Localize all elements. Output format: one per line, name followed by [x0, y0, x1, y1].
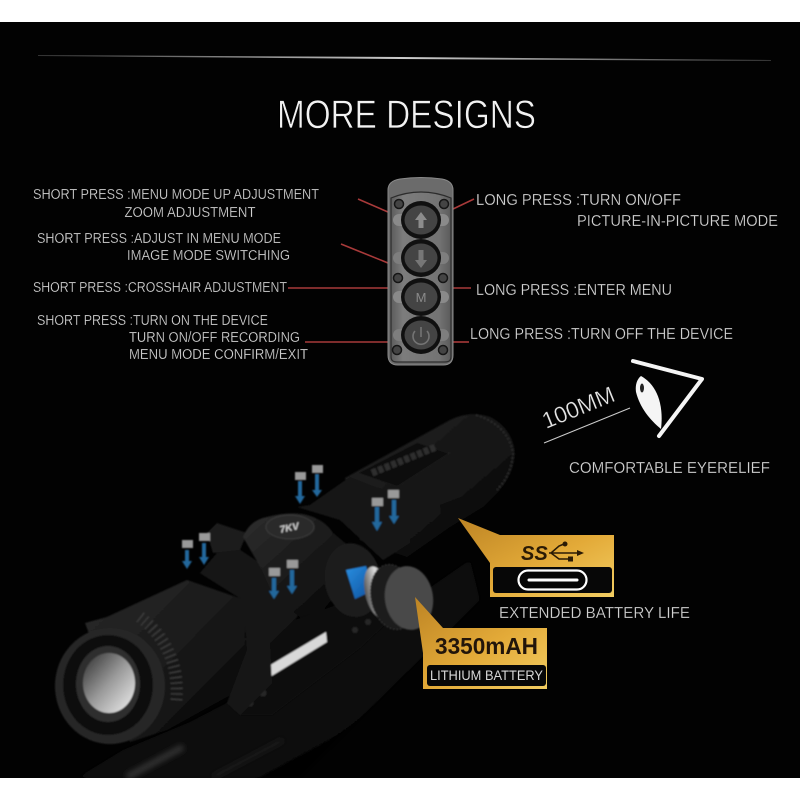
- icon: SuperSpeed USB: SS: [521, 543, 548, 565]
- callout: USB type-C: [458, 518, 614, 597]
- right long press labels: PICTURE-IN-PICTURE MODE: [577, 213, 778, 230]
- left short press labels: MENU MODE CONFIRM/EXIT: [129, 347, 308, 363]
- callout: battery capacity: [415, 597, 547, 689]
- down button: [401, 239, 441, 277]
- red leader lines: [288, 199, 474, 342]
- focus ribs: [140, 617, 177, 704]
- left short press labels: SHORT PRESS :MENU MODE UP ADJUSTMENT: [33, 187, 319, 203]
- menu button: M: [416, 290, 426, 305]
- USB caption: EXTENDED BATTERY LIFE: [499, 605, 690, 622]
- top highlight line: [38, 55, 771, 61]
- centre turret: [207, 513, 357, 617]
- icon: eye: [633, 361, 702, 436]
- menu button: [401, 278, 441, 316]
- title: MORE DESIGNS: [277, 93, 536, 137]
- thermal scope: [55, 414, 515, 744]
- left short press labels: SHORT PRESS :CROSSHAIR ADJUSTMENT: [33, 280, 287, 296]
- front mount ring: [200, 548, 300, 715]
- embossed control label: [357, 442, 450, 487]
- right long press labels: LONG PRESS :ENTER MENU: [476, 282, 672, 299]
- mounting screw arrows: [182, 465, 399, 599]
- power button: [401, 316, 441, 354]
- callout: battery capacity: LITHIUM BATTERY: [430, 667, 544, 683]
- left short press labels: [33, 187, 319, 363]
- left short press labels: IMAGE MODE SWITCHING: [127, 248, 290, 264]
- mount base: [240, 600, 392, 715]
- left short press labels: SHORT PRESS :ADJUST IN MENU MODE: [37, 231, 281, 247]
- right long press labels: LONG PRESS :TURN ON/OFF: [476, 192, 681, 209]
- eye relief caption: COMFORTABLE EYERELIEF: [569, 460, 770, 477]
- eye relief distance: 100MM: [538, 381, 618, 434]
- left short press labels: ZOOM ADJUSTMENT: [124, 205, 256, 221]
- rear mount ring: [297, 477, 410, 560]
- objective lens: [55, 628, 165, 744]
- right long press labels: [470, 192, 778, 343]
- front tube: [85, 580, 245, 742]
- battery knob: [319, 539, 437, 634]
- left short press labels: SHORT PRESS :TURN ON THE DEVICE: [37, 313, 268, 329]
- right long press labels: LONG PRESS :TURN OFF THE DEVICE: [470, 326, 733, 343]
- panel screws: [392, 200, 448, 354]
- callout: battery capacity: 3350mAH: [435, 633, 538, 659]
- left short press labels: TURN ON/OFF RECORDING: [129, 330, 300, 346]
- up button: [401, 201, 441, 239]
- rifle body: [0, 560, 800, 800]
- button panel: [388, 178, 453, 365]
- icon: SuperSpeed USB: [521, 542, 584, 565]
- icon: USB-C port: [518, 570, 586, 590]
- rear tube: [345, 414, 515, 557]
- centre turret: 7KV: [279, 521, 301, 536]
